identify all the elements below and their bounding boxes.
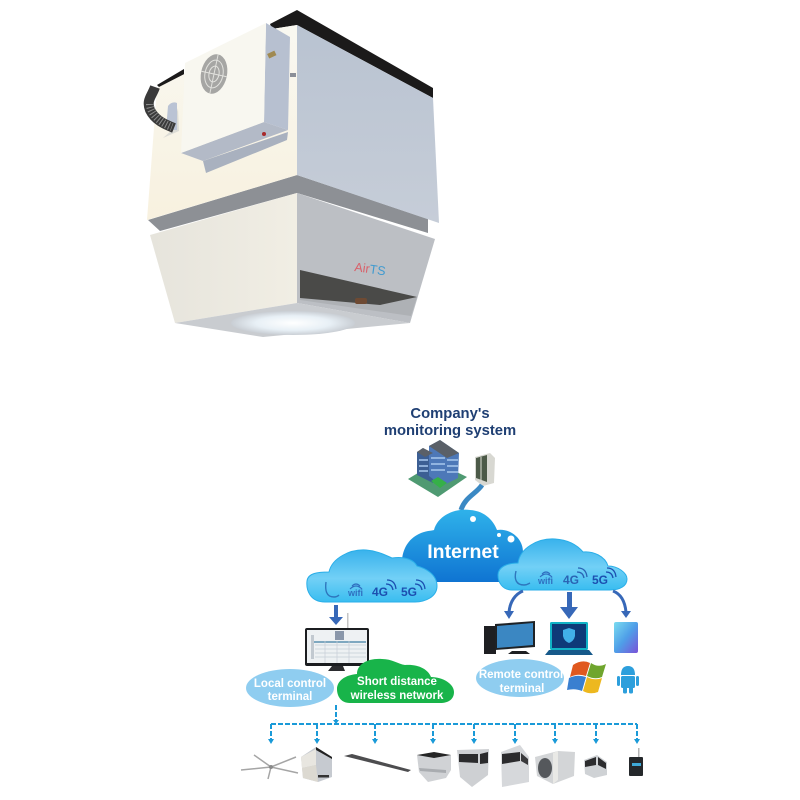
arrow: right cloud to laptop bbox=[560, 592, 578, 619]
arrow: left cloud to monitor bbox=[329, 605, 343, 625]
icon: laptop bbox=[545, 622, 593, 655]
device: unit 5 bbox=[535, 751, 575, 784]
icon: local monitor bbox=[305, 613, 369, 671]
bracket plate bbox=[163, 108, 179, 138]
air outlet slot bbox=[300, 270, 417, 316]
label: Short distance wireless network bbox=[337, 659, 454, 703]
AirTS logo: AirTS bbox=[354, 260, 386, 278]
sensor in slot bbox=[355, 298, 367, 304]
left cloud signal labels: 5G bbox=[401, 585, 417, 599]
title: Company's monitoring system: monitoring system bbox=[384, 423, 516, 439]
lower housing bottom with lamp bbox=[175, 303, 410, 337]
arrow: right cloud to phone bbox=[613, 591, 631, 618]
middle recessed band bbox=[148, 175, 428, 233]
device: long bar unit bbox=[344, 754, 411, 772]
arrow: right cloud to desktop bbox=[504, 591, 523, 619]
control box front bbox=[181, 23, 266, 153]
left cloud signal labels: 4G bbox=[372, 585, 388, 599]
upper cabinet left face bbox=[147, 25, 297, 220]
lamp glow bbox=[231, 311, 355, 335]
corrugated hose bbox=[149, 87, 174, 128]
lower housing right face bbox=[297, 193, 435, 323]
label: Local control terminal bbox=[246, 669, 334, 707]
dashed bus arrowheads bbox=[268, 720, 640, 744]
icon: office building bbox=[408, 440, 467, 497]
device: unit 2 bbox=[417, 752, 451, 782]
label: Remote control terminal bbox=[476, 659, 564, 697]
device: unit 4 bbox=[501, 745, 529, 787]
right cloud signal labels: wifi bbox=[537, 576, 553, 586]
lower housing left face bbox=[150, 193, 297, 323]
device: controller bbox=[629, 748, 643, 776]
product photo: AirTS unit bbox=[147, 10, 439, 337]
right cloud signal labels: 4G bbox=[563, 573, 579, 587]
control box mounting shelf bbox=[203, 132, 288, 173]
internet cloud bbox=[402, 510, 523, 582]
device: unit 6 bbox=[584, 755, 607, 778]
control box underside bbox=[181, 122, 288, 161]
title: Company's monitoring system bbox=[384, 406, 516, 439]
right cloud signal labels: 5G bbox=[592, 573, 608, 587]
left wireless cloud bbox=[307, 550, 437, 602]
icon: Android robot bbox=[617, 666, 639, 694]
label: Local control terminal: terminal bbox=[268, 691, 312, 703]
label: Remote control terminal: Remote control bbox=[479, 669, 563, 681]
title: Company's monitoring system: Company's bbox=[410, 406, 490, 422]
outlet slot dark interior bbox=[300, 270, 417, 305]
device: unit 3 bbox=[457, 749, 489, 787]
right cloud signal labels bbox=[515, 568, 616, 587]
fan grille bbox=[197, 52, 231, 96]
icon: server rack bbox=[475, 453, 495, 486]
label: Local control terminal: Local control bbox=[254, 678, 326, 690]
device: ceiling fan bbox=[241, 755, 298, 779]
icon: desktop computer bbox=[484, 621, 535, 654]
dashed network bus bbox=[271, 705, 637, 741]
label: Short distance wireless network: wireless network bbox=[350, 690, 444, 702]
antenna connector bbox=[267, 51, 276, 59]
indicator light bbox=[262, 132, 266, 136]
label: Short distance wireless network: Short distance bbox=[357, 676, 437, 688]
icon: smartphone bbox=[614, 622, 638, 653]
device: unit 1 bbox=[301, 747, 332, 782]
left cloud signal labels bbox=[326, 580, 425, 599]
bracket bbox=[166, 102, 177, 130]
icon: Windows logo bbox=[567, 661, 606, 693]
label: Remote control terminal: terminal bbox=[500, 683, 544, 695]
side latch bbox=[290, 73, 296, 77]
internet cloud: Internet bbox=[427, 541, 499, 563]
upper cabinet right face bbox=[297, 25, 439, 223]
connection cables from server to internet cloud bbox=[461, 485, 482, 510]
left cloud signal labels: wifi bbox=[347, 588, 363, 598]
right wireless cloud bbox=[498, 539, 627, 590]
black top frame bbox=[157, 10, 433, 98]
control box side bbox=[264, 23, 290, 130]
